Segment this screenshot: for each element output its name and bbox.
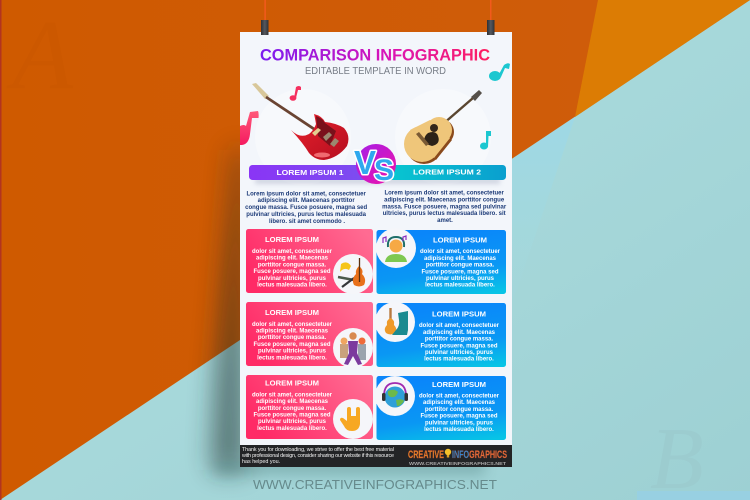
poster drop shadow (212, 150, 244, 470)
card: blue 3 (375, 376, 506, 440)
card: blue 1 (376, 228, 506, 294)
card: blue 2: dolor sit amet, consectetuer (419, 323, 500, 329)
shadow under header bars (255, 178, 500, 184)
card: blue 2: pulvinar ultricies, purus (425, 350, 494, 356)
footer logo: CREATIVE (408, 449, 444, 461)
footer bar (240, 445, 512, 467)
card: pink 1: dolor sit amet, consectetuer (252, 249, 333, 255)
card: blue 2: porttitor congue massa. (425, 337, 494, 343)
icon: large pink music note (240, 111, 259, 145)
header bar: Lorem Ipsum 1 (249, 165, 374, 180)
VS badge: S (374, 154, 394, 187)
card: pink 2: LOREM IPSUM (265, 310, 319, 317)
card: pink 1: Fusce posuere, magna sed (253, 269, 331, 275)
header bar: Lorem Ipsum 1: LOREM IPSUM 1 (276, 168, 344, 177)
hanging clip right (487, 20, 494, 35)
header bar: Lorem Ipsum 2: LOREM IPSUM 2 (413, 168, 481, 176)
card: pink 1: pulvinar ultricies, purus (258, 276, 327, 282)
watermark letter A: A (6, 0, 74, 110)
icon: guitar and boot (375, 302, 415, 342)
card: pink 1: porttitor congue massa. (258, 262, 327, 268)
card: blue 3: adipiscing elit. Maecenas (423, 400, 496, 406)
card: blue 1: porttitor congue massa. (426, 263, 495, 269)
card: pink 1: lectus malesuada libero. (257, 282, 327, 288)
icon: globe with headphones (375, 376, 415, 416)
poster (240, 32, 512, 467)
card: pink 3: LOREM IPSUM (265, 380, 319, 387)
card: pink 3: Fusce posuere, magna sed (253, 412, 331, 418)
card: pink 3: adipiscing elit. Maecenas (256, 399, 329, 405)
card: blue 2: Fusce posuere, magna sed (420, 343, 498, 349)
card: pink 2 (246, 302, 373, 368)
card: blue 3: porttitor congue massa. (425, 407, 494, 413)
icon: rock hand (333, 399, 373, 439)
intro text right: ultricies, purus lectus malesuada libero. sit (383, 211, 506, 217)
poster paper (240, 32, 512, 446)
card: blue 1: lectus malesuada libero. (425, 283, 495, 289)
card: pink 2: lectus malesuada libero. (257, 355, 327, 361)
card: pink 2: Fusce posuere, magna sed (253, 342, 331, 348)
card: blue 1: adipiscing elit. Maecenas (424, 256, 497, 262)
card: blue 2: LOREM IPSUM (432, 312, 486, 319)
intro text left: congue massa. Fusce posuere, magna sed (245, 205, 368, 211)
icon: instruments (333, 254, 373, 294)
card: blue 3: LOREM IPSUM (432, 382, 486, 389)
icon: person with headphones (376, 228, 416, 268)
card: blue 1: dolor sit amet, consectetuer (420, 249, 501, 255)
subtitle: EDITABLE TEMPLATE IN WORD (305, 66, 446, 77)
website url: WWW.CREATIVEINFOGRAPHICS.NET (253, 477, 497, 492)
faint circle right (395, 89, 491, 185)
VS badge (354, 144, 396, 187)
card: blue 3: pulvinar ultricies, purus (425, 420, 494, 426)
card: pink 3: porttitor congue massa. (258, 406, 327, 412)
intro text right: amet. (437, 218, 453, 224)
card: pink 3: pulvinar ultricies, purus (258, 419, 327, 425)
card: blue 2: lectus malesuada libero. (424, 357, 494, 363)
icon: band (333, 328, 373, 368)
intro text left: Lorem ipsum dolor sit amet, consectetuer (246, 191, 367, 197)
electric guitar (252, 83, 348, 160)
hanging string left (264, 0, 266, 21)
footer logo (408, 449, 507, 466)
acoustic guitar (404, 90, 482, 164)
footer logo: INFOGRAPHICS (452, 449, 507, 461)
card: pink 2: dolor sit amet, consectetuer (252, 322, 333, 328)
card: pink 1: adipiscing elit. Maecenas (256, 256, 329, 262)
intro text left: pulvinar ultricies, purus lectus malesuada (246, 212, 367, 218)
icon: small teal music note (480, 131, 491, 150)
card: pink 2: porttitor congue massa. (258, 335, 327, 341)
icon: large teal music note (489, 63, 510, 81)
header bar: Lorem Ipsum 2 (380, 165, 506, 180)
card: blue 1: pulvinar ultricies, purus (426, 276, 495, 282)
card: blue 2 (375, 302, 506, 367)
intro text left: adipiscing elit. Maecenas porttitor (258, 198, 355, 204)
VS badge: V (354, 144, 376, 181)
hanging string right (490, 0, 491, 21)
card: pink 1 (246, 229, 373, 294)
icon: small pink music note (290, 86, 301, 101)
intro text left: libero. sit amet commodo . (269, 219, 345, 225)
card: blue 3: dolor sit amet, consectetuer (419, 394, 500, 400)
footer thank-you note: with professional design, consider sharing our website if this resource (241, 453, 394, 459)
footer thank-you note: Thank you for downloading, we strive to offer the best free material (242, 447, 394, 453)
footer logo: WWW.CREATIVEINFOGRAPHICS.NET (409, 461, 506, 466)
card: pink 3 (246, 375, 373, 439)
card: blue 3: Fusce posuere, magna sed (420, 414, 498, 420)
hanging clip left (261, 20, 268, 35)
faint circle left (255, 89, 351, 185)
card: blue 2: adipiscing elit. Maecenas (423, 330, 496, 336)
shadow under poster (215, 460, 485, 474)
card: pink 1: LOREM IPSUM (265, 237, 319, 244)
footer thank-you note: has helped you. (242, 459, 280, 465)
intro text right: Lorem ipsum dolor sit amet, consectetuer (384, 190, 505, 196)
intro text right: massa. Fusce posuere, magna sed pulvinar (382, 204, 507, 210)
card: pink 2: pulvinar ultricies, purus (258, 349, 327, 355)
card: pink 2: adipiscing elit. Maecenas (256, 328, 329, 334)
card: pink 3: lectus malesuada libero. (257, 426, 327, 432)
title: COMPARISON INFOGRAPHIC (260, 46, 490, 64)
intro text right: adipiscing elit. Maecenas porttitor congue (384, 197, 505, 203)
card: blue 1: LOREM IPSUM (433, 238, 487, 245)
card: blue 1: Fusce posuere, magna sed (421, 269, 499, 275)
card: blue 3: lectus malesuada libero. (424, 427, 494, 433)
card: pink 3: dolor sit amet, consectetuer (252, 392, 333, 398)
